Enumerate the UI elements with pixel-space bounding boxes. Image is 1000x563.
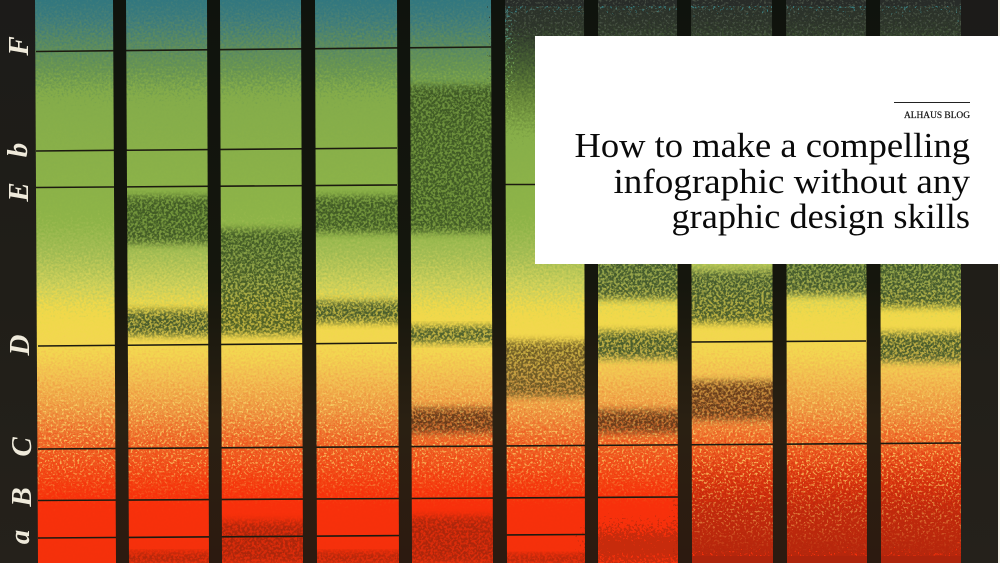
Fraunhofer line letters: F: [3, 36, 35, 57]
light stipple over the dark red zone: [690, 445, 961, 555]
left dark scale column: [0, 0, 38, 563]
Fraunhofer line letters: C: [6, 437, 38, 457]
Fraunhofer line letters: B: [6, 487, 38, 508]
headline: How to make a compelling: [574, 126, 970, 165]
Fraunhofer line letters: b: [2, 143, 34, 157]
light stipple in the orange zone: [36, 365, 961, 505]
flat underlay for the dark top and dark red corners: [505, 0, 961, 6]
Fraunhofer line letters: E: [3, 182, 35, 203]
Fraunhofer line letters: a: [4, 530, 36, 544]
absorption bands: [120, 86, 961, 563]
title card: [535, 36, 1000, 264]
headline: [574, 126, 971, 236]
kicker: ALHAUS BLOG: ALHAUS BLOG: [904, 110, 971, 120]
Fraunhofer line letters: [2, 36, 38, 544]
right dark column: [961, 0, 998, 563]
headline: graphic design skills: [672, 197, 970, 236]
white right edge: [998, 0, 1000, 563]
vertical black bars: [113, 0, 881, 563]
dark red bottom underlay: [691, 556, 961, 563]
kicker rule: [894, 102, 970, 103]
headline: infographic without any: [614, 162, 971, 201]
Fraunhofer line letters: D: [4, 334, 36, 356]
grey stipple on the dark top zone: [505, 0, 961, 36]
